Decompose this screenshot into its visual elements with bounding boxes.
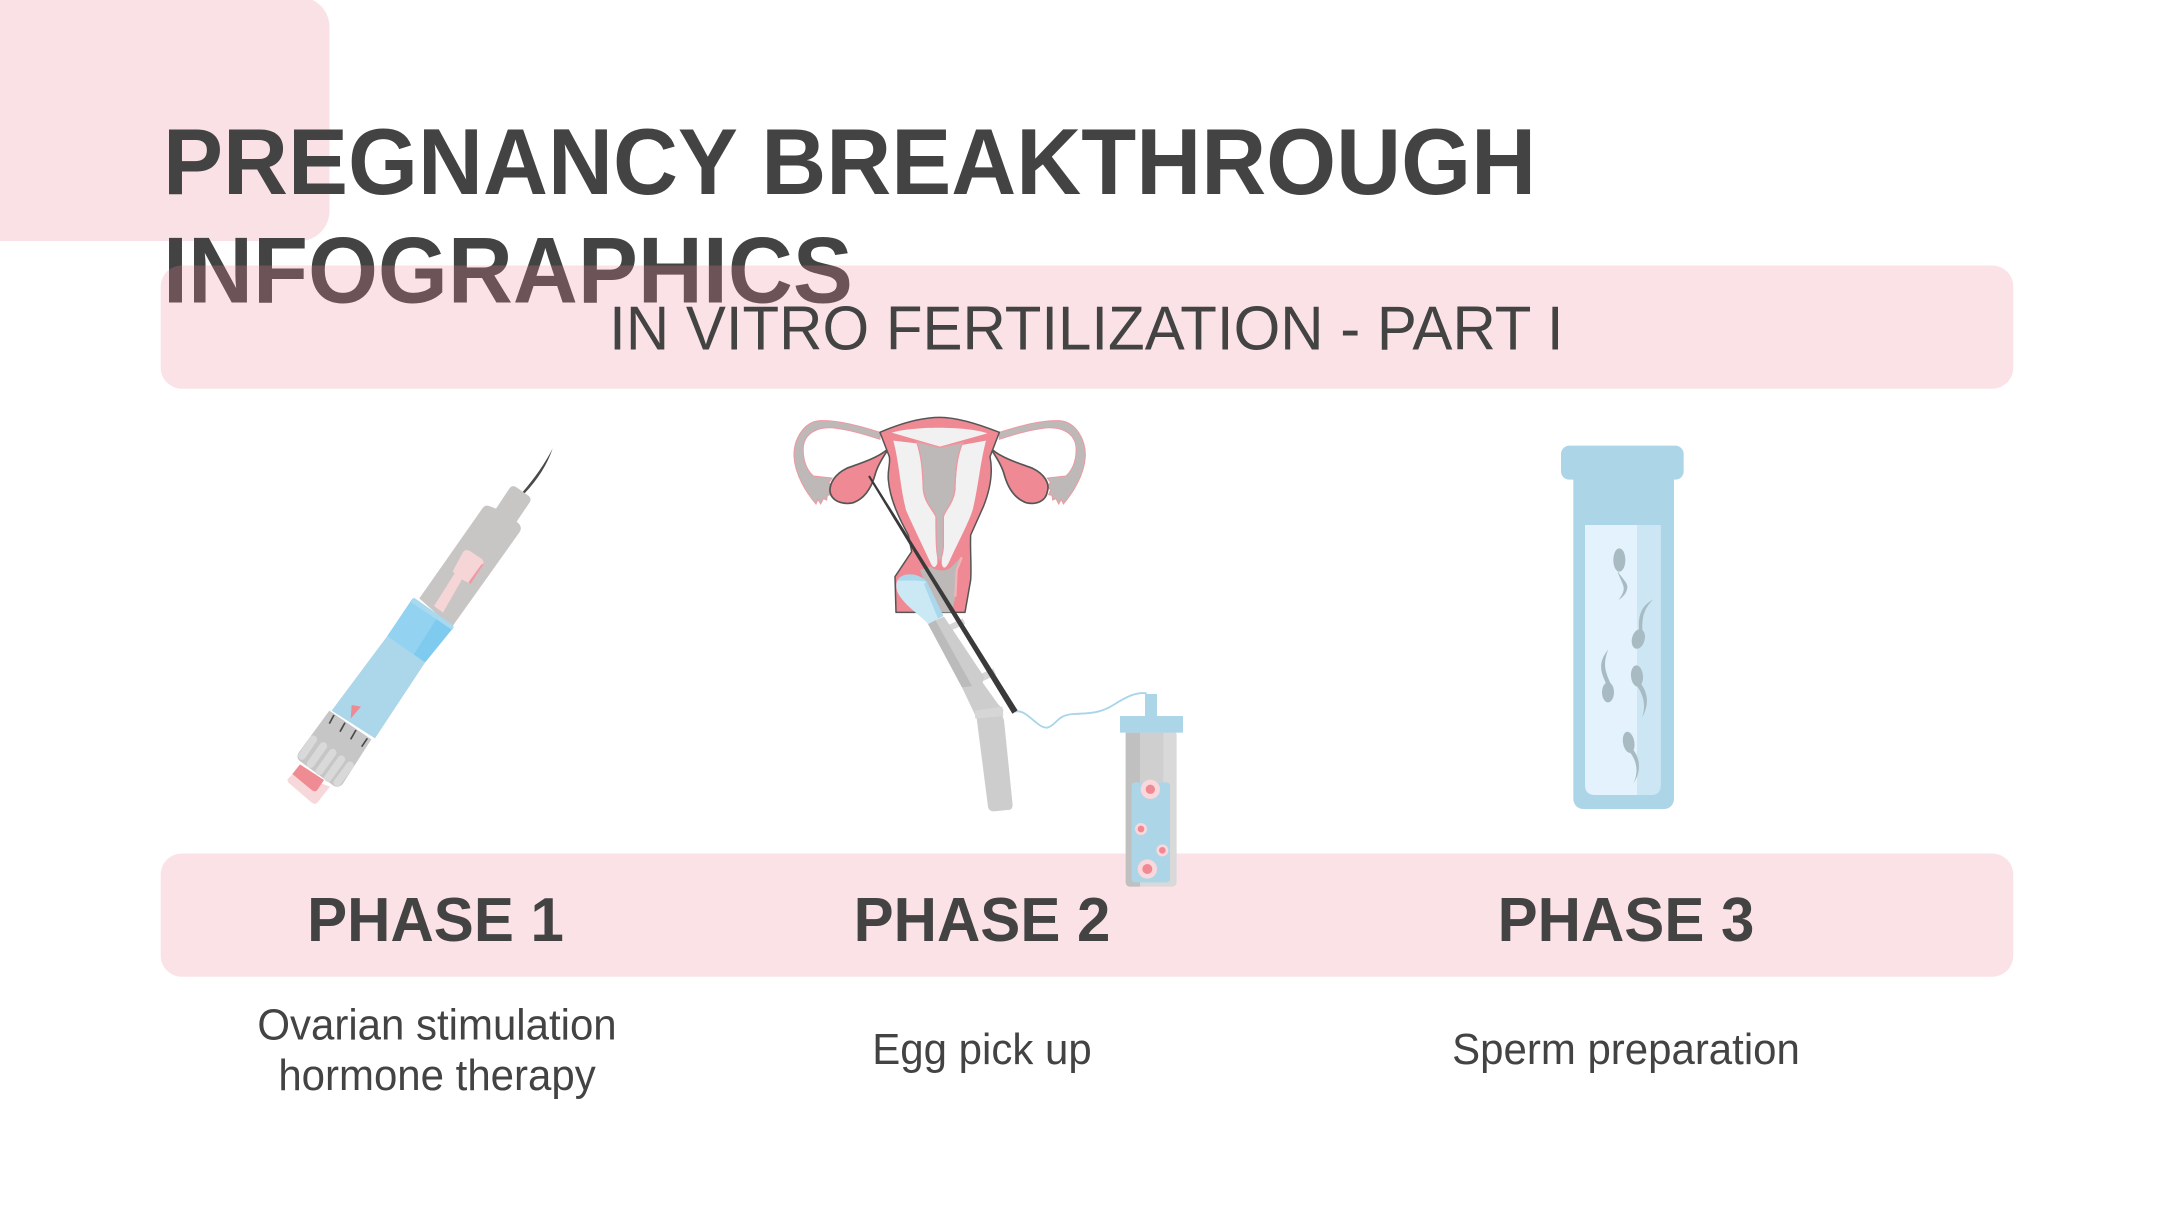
subtitle band [161,266,2013,389]
title [163,110,1536,323]
icon: hormone injection pen [287,448,553,804]
probe and collection tube [896,574,1183,887]
phase 1 description: Ovarian stimulation [257,1001,617,1050]
phase 2 heading: PHASE 2 [854,885,1110,954]
phase 3 description: Sperm preparation [1452,1025,1800,1074]
phase 1 heading: PHASE 1 [307,885,564,954]
phase band [161,854,2013,977]
subtitle: IN VITRO FERTILIZATION - PART I [609,293,1564,363]
uterus diagram [794,417,1085,612]
phase 1 description: hormone therapy [278,1051,596,1100]
title: PREGNANCY BREAKTHROUGH [163,110,1536,214]
phase 1 description [257,1001,617,1100]
retrieval needle [868,476,1018,714]
title: INFOGRAPHICS [163,219,853,323]
corner decoration [0,0,330,241]
phase 2 description: Egg pick up [872,1025,1092,1074]
icon: egg pick up with uterus, probe and needle [794,417,1183,887]
phase 3 heading: PHASE 3 [1498,885,1754,954]
icon: sperm test tube [1561,446,1684,809]
